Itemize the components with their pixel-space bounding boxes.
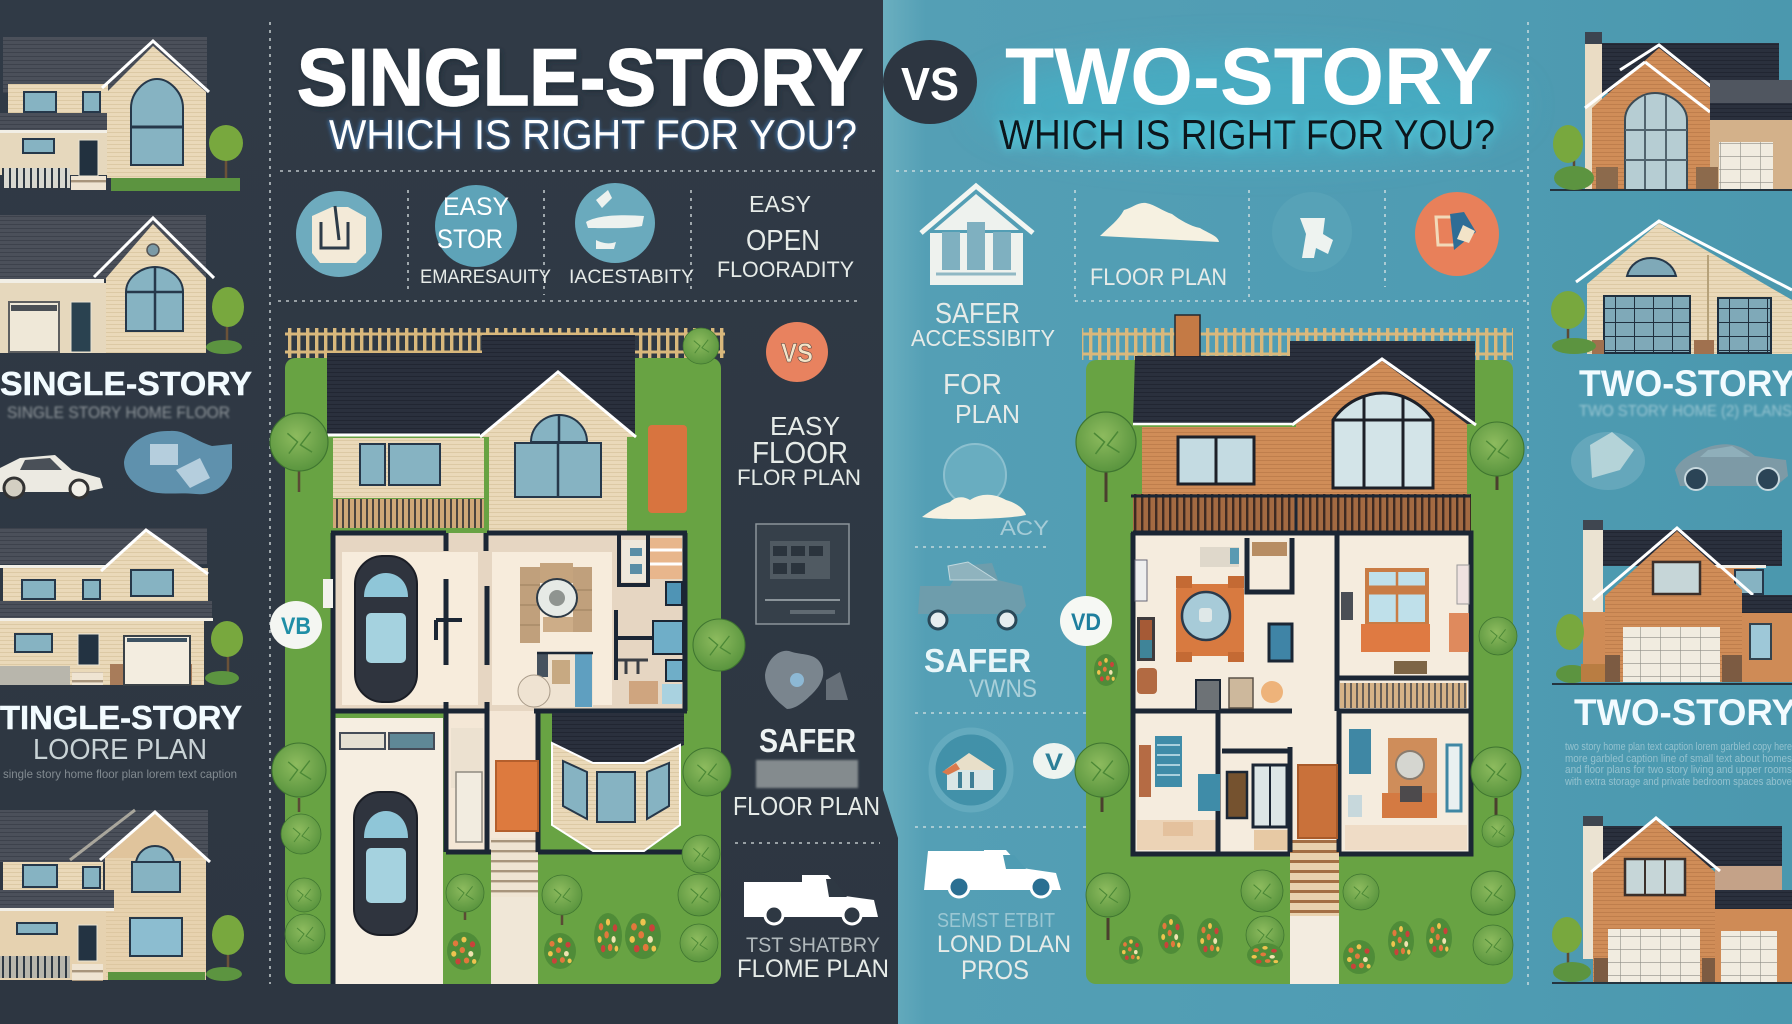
badge: VD: VD <box>1071 609 1101 636</box>
bay window roof <box>552 713 684 763</box>
bay window walls <box>552 743 680 851</box>
icon: white pickup truck <box>924 850 1061 897</box>
car one <box>355 556 417 702</box>
media console <box>518 653 593 707</box>
icon: grey blob <box>765 651 848 709</box>
fence <box>1082 328 1513 360</box>
icon: house outline <box>921 186 1033 285</box>
house A <box>1550 32 1792 190</box>
lower room floors <box>1137 820 1467 850</box>
label: lond dlan: LOND DLAN <box>937 931 1071 958</box>
label: faint caption: SEMST ETBIT <box>937 910 1055 932</box>
bedroom furniture <box>1341 565 1469 674</box>
sofa and rug <box>520 563 592 643</box>
text block: easy open floorability: FLOORADITY <box>717 257 854 282</box>
text block: easy floor plan: FLOR PLAN <box>737 465 861 490</box>
faint paragraph <box>1564 741 1792 788</box>
flower beds <box>1094 654 1452 974</box>
windows <box>1178 393 1433 488</box>
icon: faded blob <box>1571 432 1645 490</box>
front door <box>1298 765 1337 838</box>
wall notch <box>323 579 333 608</box>
faint caption: single story home floor plan lorem text caption <box>3 767 237 781</box>
badge: VD <box>1060 596 1112 646</box>
label: floor plan: FLOOR PLAN <box>733 791 880 821</box>
house 1 <box>0 37 243 191</box>
panel: two-story left column callouts <box>911 298 1071 985</box>
label: two-story: TWO-STORY <box>1574 692 1792 733</box>
indoor railing <box>1340 683 1467 708</box>
icon: faded plan circle <box>1272 192 1352 272</box>
bay windows <box>563 761 669 822</box>
panel: single-story header <box>297 33 863 158</box>
text block: easy floor plan <box>737 411 861 490</box>
upper walls <box>333 372 636 531</box>
garage door panels <box>340 733 434 749</box>
badge: orange VS <box>766 322 828 382</box>
house 4 <box>0 810 244 981</box>
stairs <box>491 838 538 897</box>
badge: orange VS: VS <box>781 338 813 368</box>
lawn <box>1086 360 1513 984</box>
front door <box>496 761 538 831</box>
side orange door <box>648 425 687 513</box>
text block: for plan: FOR <box>943 369 1002 401</box>
house C <box>1552 520 1792 684</box>
lower left furniture <box>1139 736 1287 836</box>
icon: cloud with sphere <box>922 444 1026 519</box>
icon: chair circle <box>296 191 382 277</box>
lower right furniture <box>1348 729 1461 818</box>
label: safer: SAFER <box>924 642 1031 679</box>
label: pros: PROS <box>961 955 1029 985</box>
badge: VB: VB <box>281 613 311 640</box>
icon: easy storage circle <box>435 185 517 267</box>
badge: V: V <box>1045 749 1063 776</box>
panel: two-story header <box>999 32 1495 158</box>
floor interior <box>331 533 687 711</box>
label: single-story: SINGLE-STORY <box>0 365 252 402</box>
windows <box>360 415 601 497</box>
label: safer: SAFER <box>759 722 856 759</box>
label: loore plan: LOORE PLAN <box>33 734 207 766</box>
icon: blurred strip <box>756 760 858 788</box>
balcony <box>333 499 484 528</box>
blue screens and shelves <box>618 538 683 704</box>
icon: blue blob <box>124 431 232 494</box>
label: tingle-story: TINGLE-STORY <box>0 699 242 736</box>
icon: cloud <box>1100 203 1219 242</box>
text block: safer accessibility: SAFER <box>935 298 1020 330</box>
icon: accessibility circle <box>575 183 655 263</box>
VS badge <box>883 40 977 124</box>
house 3 <box>0 528 243 685</box>
subtitle: which is right for you: WHICH IS RIGHT FOR YOU? <box>329 111 857 158</box>
flower beds <box>447 913 661 970</box>
trees <box>1075 412 1524 965</box>
lawn <box>285 358 721 984</box>
panel: two-story house column <box>1550 32 1792 983</box>
balcony railing <box>1131 494 1471 533</box>
text block: easy floor plan: FLOOR <box>752 435 848 470</box>
text block: safer accessibility <box>911 298 1055 351</box>
icon: house in circle <box>932 731 1010 809</box>
text block: for plan: PLAN <box>955 399 1020 429</box>
panel: single-story house column <box>0 37 252 981</box>
house 2 <box>0 215 244 354</box>
badge: VB <box>270 601 322 649</box>
walkway <box>491 897 538 984</box>
icon: grey car <box>1675 444 1788 490</box>
VS badge: VS <box>901 58 959 110</box>
text block: safer accessibility: ACCESSIBITY <box>911 325 1055 351</box>
title: single-story: SINGLE-STORY <box>297 33 863 123</box>
walkway <box>1290 916 1339 984</box>
teal heading glow <box>980 53 1520 157</box>
text block: easy open floorability: OPEN <box>746 225 820 257</box>
panel: single-story right column callouts <box>733 322 889 983</box>
label: satbry: TST SHATBRY <box>746 934 880 957</box>
label: acy: ACY <box>1000 517 1049 540</box>
stairs <box>1290 840 1339 916</box>
subtitle: which is right for you, dark: WHICH IS RIGHT FOR YOU? <box>999 111 1495 158</box>
text block: easy open floorability: EASY <box>749 191 811 217</box>
chimney <box>1175 315 1200 365</box>
hall floor <box>446 711 538 852</box>
lighter floor centre <box>342 552 612 705</box>
panel: single-story feature icons <box>296 183 854 288</box>
roof <box>1133 341 1475 424</box>
interior walls <box>1133 533 1471 854</box>
floor interior <box>1133 535 1471 854</box>
icon: easy storage circle: STOR <box>437 224 503 254</box>
icon: white pickup truck <box>744 875 878 924</box>
text block: easy open floorability <box>717 191 854 282</box>
panel: single-story floor plan <box>270 328 745 984</box>
wood walls <box>1133 359 1476 495</box>
label: accessibility: IACESTABITY <box>569 267 694 288</box>
label: easy accessibility: EMARESAUITY <box>420 267 551 288</box>
fence <box>285 328 725 358</box>
icon: floor plan frame <box>756 524 849 624</box>
icon: easy storage circle: EASY <box>443 193 509 221</box>
icon: white car <box>0 455 103 498</box>
house D <box>1552 816 1792 983</box>
background: single-story dark side <box>0 0 898 1024</box>
roof <box>327 335 635 437</box>
icon: orange circle <box>1415 192 1499 276</box>
label: floor plan: FLOOR PLAN <box>1090 264 1227 291</box>
panel: two-story feature icons <box>921 186 1499 291</box>
background: two-story teal side <box>880 0 1792 1024</box>
garage hall fixture <box>451 728 483 842</box>
car two <box>354 792 417 935</box>
living room furniture <box>1135 542 1292 711</box>
text block: easy floor plan: EASY <box>770 411 840 441</box>
living table with chairs <box>1176 576 1244 662</box>
title: two-story: TWO-STORY <box>1005 32 1493 122</box>
faint caption: SINGLE STORY HOME FLOOR <box>7 403 230 422</box>
interior walls <box>331 533 687 984</box>
label: flome plan: FLOME PLAN <box>737 955 889 983</box>
panel: two-story floor plan <box>1075 315 1524 984</box>
partition stubs <box>436 535 684 680</box>
label: views: VWNS <box>969 675 1037 703</box>
house B <box>1551 221 1792 354</box>
text block: for plan <box>943 369 1020 429</box>
badge: V <box>1033 743 1075 779</box>
garage room <box>331 718 443 984</box>
icon: teal car <box>918 562 1026 629</box>
trees <box>270 328 745 962</box>
